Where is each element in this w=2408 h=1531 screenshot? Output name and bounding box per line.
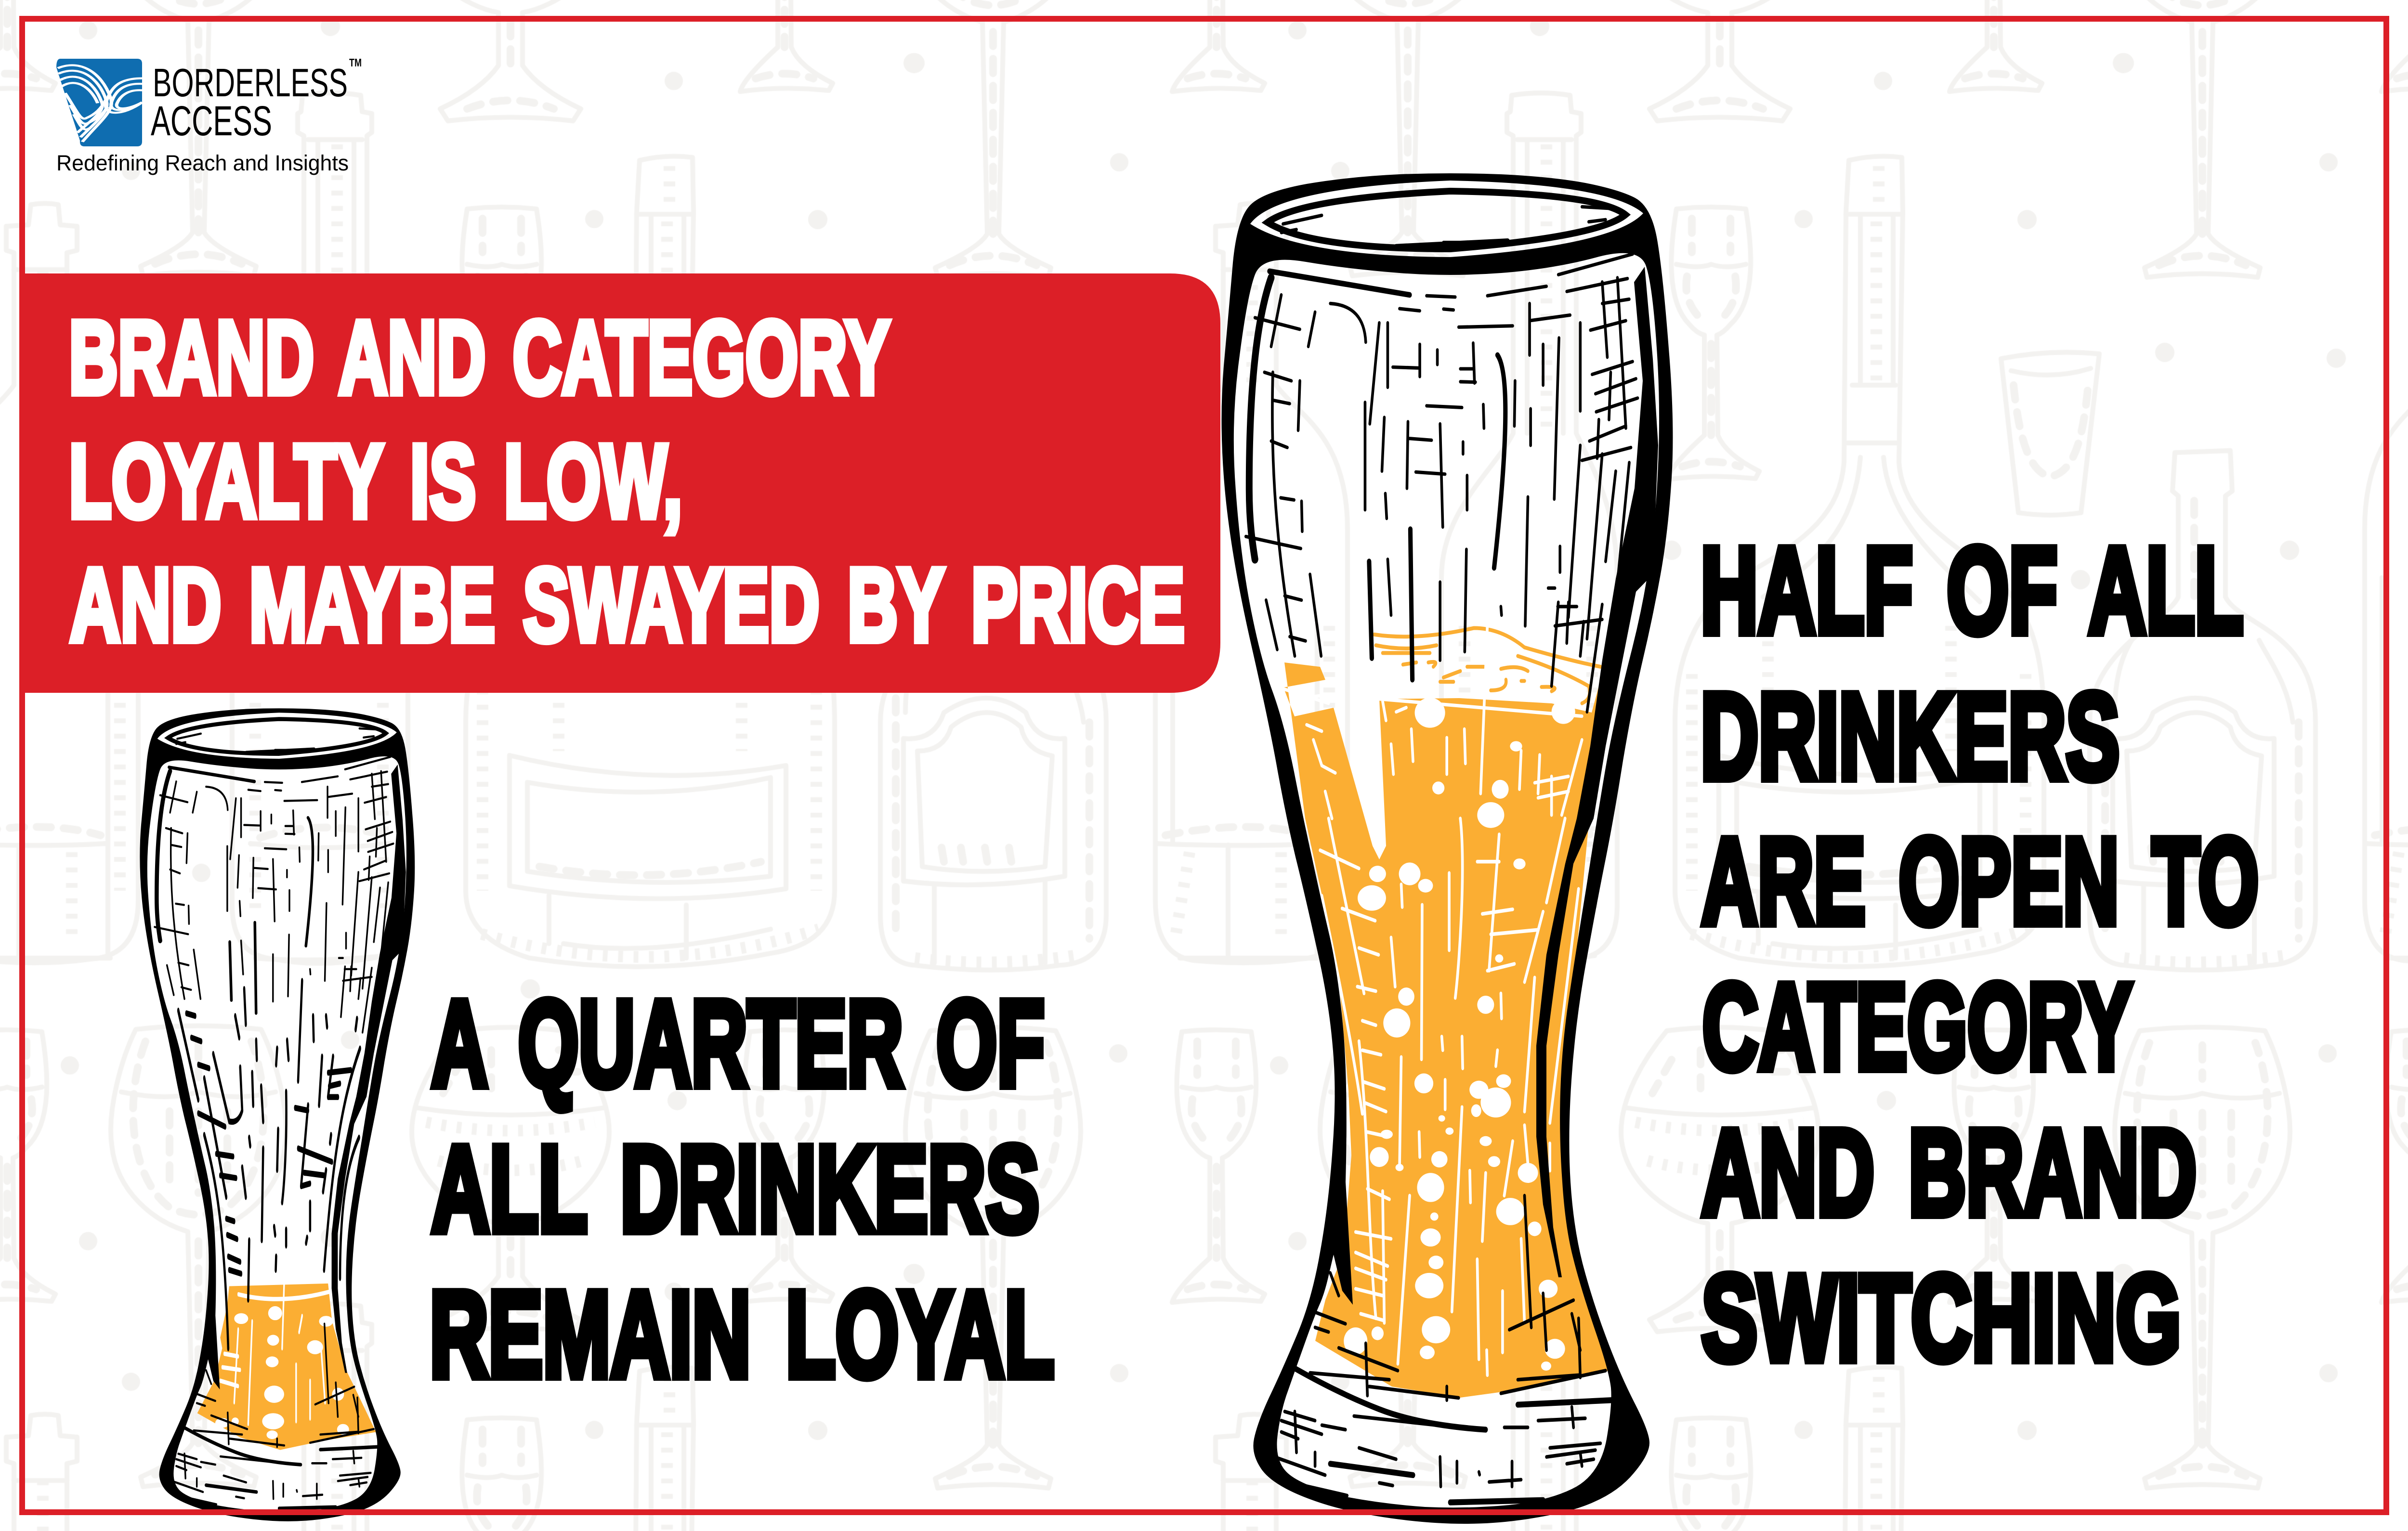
small glass outline: [140, 708, 415, 1521]
thick shade on right wall: [1536, 267, 1658, 1277]
red heading banner: [19, 273, 1220, 693]
text: half open to switching: DRINKERS: [1701, 668, 2120, 804]
small beer glass: a quarter full: [140, 708, 415, 1521]
banner heading text: AND MAYBE SWAYED BY PRICE: [70, 546, 1185, 663]
hatching, upper body: [1246, 207, 1638, 712]
logo mark: [56, 59, 142, 146]
small glass mid-body hatching: [178, 981, 360, 1349]
logo: Borderless Access: ACCESS: [151, 98, 272, 144]
small glass liquid: [197, 1284, 376, 1450]
banner heading text: [69, 299, 1185, 663]
glass silhouette with window: [1221, 173, 1673, 1524]
text: a quarter remain loyal: REMAIN LOYAL: [430, 1266, 1054, 1402]
large beer glass: half full: [1221, 173, 1673, 1524]
logo: Borderless Access: TM: [349, 56, 362, 69]
text: a quarter remain loyal: ALL DRINKERS: [432, 1120, 1039, 1257]
hatching, base: [1274, 1195, 1612, 1503]
text: a quarter remain loyal: A QUARTER OF: [432, 975, 1045, 1112]
text: half open to switching: [1701, 522, 2259, 1386]
banner heading text: LOYALTY IS LOW,: [69, 423, 682, 539]
text: a quarter remain loyal: [430, 975, 1054, 1402]
text: half open to switching: SWITCHING: [1701, 1249, 2181, 1386]
banner heading text: BRAND AND CATEGORY: [69, 299, 890, 415]
text: half open to switching: CATEGORY: [1702, 958, 2132, 1095]
large glass liquid: [1281, 626, 1609, 1398]
large glass outline: [1221, 173, 1673, 1524]
logo wordmark: BORDERLESS: [153, 60, 348, 105]
tagline: Redefining Reach and Insights: [56, 151, 349, 175]
rim ring: [1268, 191, 1625, 249]
logo: Borderless Access: [56, 56, 362, 175]
